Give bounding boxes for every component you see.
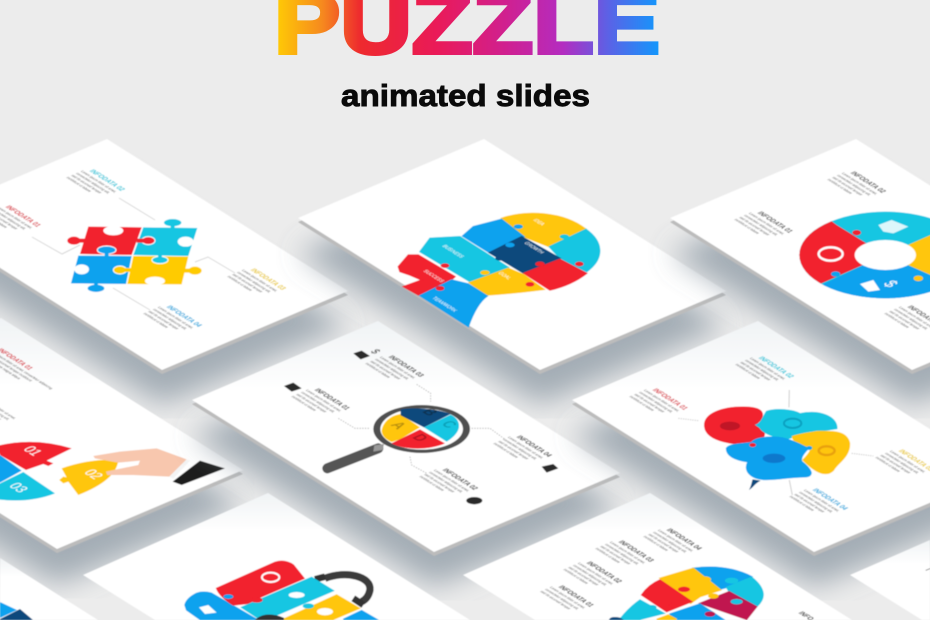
text: infodata 02 <box>418 466 479 499</box>
slide: bottom right partial <box>850 540 930 620</box>
text: infodata 02: consectetur adipiscing elit, <box>75 172 111 194</box>
text: infodata 03: sed do eiusmod tempor <box>599 545 632 565</box>
hand and pieces: 02 <box>80 467 107 481</box>
slide: magnifier <box>192 321 620 587</box>
text: infodata 04 <box>492 433 553 466</box>
text: infodata 01: sed do eiusmod tempor <box>539 590 572 610</box>
text: infodata 01: INFODATA 01 <box>556 585 595 608</box>
text: infodata 04: INFODATA 04 <box>514 435 553 458</box>
text: infodata 04: sed do eiusmod tempor <box>497 440 530 460</box>
text: infodata 02: sed do eiusmod tempor <box>739 361 772 381</box>
text: infodata 04: consectetur adipiscing elit, <box>893 308 929 330</box>
slide: puzzle bag <box>83 493 470 620</box>
text: infodata 01: sed do eiusmod tempor <box>295 393 328 413</box>
donut puzzle ring: $ <box>879 279 902 290</box>
text: infodata 02: INFODATA 02 <box>848 171 887 194</box>
text: infodata 01: Lorem ipsum dolor sit amet, <box>747 212 786 235</box>
text: infodata 04: sed do eiusmod tempor <box>147 310 180 330</box>
text: infodata 04: consectetur adipiscing elit, <box>652 531 688 553</box>
text: infodata 02: consectetur adipiscing elit, <box>744 359 780 381</box>
head labels: BUSINESS <box>440 244 466 259</box>
text: infodata 02 <box>826 169 887 202</box>
text: infodata 02: Lorem ipsum dolor sit amet, <box>576 562 615 585</box>
slide: puzzle donut <box>670 139 930 405</box>
text: infodata 01: sed do eiusmod tempor <box>738 216 771 236</box>
text: infodata 02: consectetur adipiscing elit, <box>428 471 464 493</box>
text: infodata 02: incididunt ut labore <box>734 363 761 380</box>
text: infodata 04: Lorem ipsum dolor sit amet, <box>506 436 545 459</box>
text: infodata 04: sed do eiusmod tempor <box>793 493 826 513</box>
hand and pieces: 01 <box>20 444 46 458</box>
head puzzle pieces <box>398 213 600 327</box>
text: infodata 04: incididunt ut labore <box>883 312 910 329</box>
head labels: IDEA <box>531 218 546 227</box>
text: infodata 04: consectetur adipiscing elit, <box>152 308 188 330</box>
text: infodata 04 <box>142 303 203 336</box>
connector lines <box>338 384 505 473</box>
text: infodata 02: sed do eiusmod tempor <box>831 176 864 196</box>
text: infodata 02: INFODATA 02 <box>87 169 126 192</box>
head labels: GROWTH <box>522 241 545 255</box>
slide: hand placing piece <box>0 318 243 585</box>
slide: jigsaw square <box>0 139 348 405</box>
text: infodata 04: consectetur adipiscing elit, <box>798 491 834 513</box>
magnifying glass: A <box>386 420 410 431</box>
text: infodata 01: INFODATA 01 <box>3 205 42 228</box>
text: infodata 03 <box>226 266 287 299</box>
magnifying glass: C <box>437 419 461 430</box>
text: infodata 04: INFODATA 04 <box>664 528 703 551</box>
text: infodata 04: Lorem ipsum dolor sit amet, <box>802 489 841 512</box>
text: infodata 01: Lorem ipsum dolor sit amet, <box>548 586 587 609</box>
slide: puzzle head <box>298 139 726 405</box>
text: infodata 01: Lorem ipsum dolor sit amet, <box>304 389 343 412</box>
bulb puzzle <box>610 567 763 619</box>
text: infodata 04: Lorem ipsum dolor sit amet, <box>156 306 195 329</box>
text: infodata 01 <box>290 386 351 419</box>
text: infodata 03 <box>364 353 425 386</box>
hand and pieces: 03 <box>5 481 32 494</box>
text: infodata 03: Lorem ipsum dolor sit amet, <box>608 541 647 564</box>
text: infodata 01: consectetur adipiscing elit, <box>300 391 336 413</box>
slide: bottom left partial <box>0 558 98 620</box>
text: infodata 02 <box>65 167 126 200</box>
text: infodata 01: Lorem ipsum dolor sit amet, <box>642 389 681 412</box>
text: infodata 04: Lorem ipsum dolor sit amet, <box>656 529 695 552</box>
text: infodata 02: consectetur adipiscing elit, <box>836 174 872 196</box>
text: infodata 02: incididunt ut labore <box>65 176 92 193</box>
connector lines <box>678 390 873 495</box>
text: infodata 02 <box>562 559 623 592</box>
text: infodata 04 <box>788 486 849 519</box>
cloud puzzle <box>705 407 849 490</box>
text: infodata 03: Lorem ipsum dolor sit amet, <box>240 269 279 292</box>
magnifying glass: D <box>408 432 432 444</box>
text: infodata 04: consectetur adipiscing elit, <box>502 438 538 460</box>
text: infodata 03: incididunt ut labore <box>594 547 621 564</box>
text: infodata 02: INFODATA 02 <box>584 561 623 584</box>
text: infodata 02: sed do eiusmod tempor <box>70 174 103 194</box>
text: infodata 03: Lorem ipsum dolor sit amet, <box>378 356 417 379</box>
text: infodata 01: incididunt ut labore <box>733 218 760 235</box>
text: infodata 03: INFODATA 03 <box>616 540 655 563</box>
text: infodata 03: incididunt ut labore <box>874 456 901 473</box>
text: infodata 02 <box>734 354 795 387</box>
text: infodata 03: incididunt ut labore <box>364 362 391 379</box>
dark icons: $ <box>367 348 383 356</box>
text: infodata 02: sed do eiusmod tempor <box>567 566 600 586</box>
text: infodata 02: sed do eiusmod tempor <box>423 473 456 493</box>
text: infodata 01: consectetur adipiscing elit, <box>544 588 580 610</box>
text: infodata 04: INFODATA 04 <box>810 488 849 511</box>
text: infodata 01 <box>628 386 689 419</box>
text: infodata 04: incididunt ut labore <box>642 535 669 552</box>
text: infodata 02: incididunt ut labore <box>826 178 853 195</box>
text: infodata 02: incididunt ut labore <box>562 568 589 585</box>
text: infodata 01: INFODATA 01 <box>312 388 351 411</box>
text: infodata 03: INFODATA 03 <box>386 355 425 378</box>
text: infodata 04: incididunt ut labore <box>788 495 815 512</box>
text: infodata 04 <box>642 526 703 559</box>
text: infodata 01: INFODATA 01 <box>755 211 794 234</box>
text: infodata 03: consectetur adipiscing elit, <box>374 358 410 380</box>
magnifying glass <box>327 405 470 468</box>
text: infodata 03: sed do eiusmod tempor <box>879 454 912 474</box>
text: infodata 04: incididunt ut labore <box>142 312 169 329</box>
text: infodata 01: incididunt ut labore <box>628 395 655 412</box>
text: infodata 02: Lorem ipsum dolor sit amet, <box>79 170 118 193</box>
text: infodata 03 <box>874 447 930 480</box>
text: infodata 04: INFODATA 04 <box>164 305 203 328</box>
text: infodata 03: consectetur adipiscing elit, <box>884 452 920 474</box>
text: infodata 01 <box>0 203 42 236</box>
jigsaw four pieces <box>67 219 202 292</box>
text: infodata 04: sed do eiusmod tempor <box>888 310 921 330</box>
text: infodata 02: Lorem ipsum dolor sit amet, <box>432 469 471 492</box>
text: infodata 02: INFODATA 02 <box>440 468 479 491</box>
text: infodata 03: sed do eiusmod tempor <box>231 273 264 293</box>
text: infodata 04 <box>883 303 930 336</box>
text: infodata 02: consectetur adipiscing elit, <box>572 564 608 586</box>
text: infodata 01: sed do eiusmod tempor <box>633 393 666 413</box>
text: infodata 03: incididunt ut labore <box>226 275 253 292</box>
bag puzzle <box>185 561 377 619</box>
text: infodata 01 <box>733 209 794 242</box>
text: infodata 01: INFODATA 01 <box>650 388 689 411</box>
head labels <box>421 218 546 313</box>
head labels: TEAMWORK <box>430 296 459 313</box>
text: infodata 02: Lorem ipsum dolor sit amet, <box>840 172 879 195</box>
text: infodata 01: consectetur adipiscing elit, <box>743 214 779 236</box>
head labels: SUCCESS <box>421 269 446 284</box>
partial pieces <box>0 602 33 620</box>
text: infodata 02: INFODATA 02 <box>756 356 795 379</box>
text: infodata 01: incididunt ut labore <box>290 395 317 412</box>
subtitle: animated slides <box>341 78 590 113</box>
text: infodata 03: consectetur adipiscing elit, <box>604 543 640 565</box>
head labels: GOAL <box>496 271 513 281</box>
slide: puzzle bulb <box>463 493 852 620</box>
text: infodata 03: sed do eiusmod tempor <box>369 360 402 380</box>
text: infodata 03 <box>594 538 655 571</box>
slide: speech cloud <box>572 321 930 587</box>
text: infodata 03: INFODATA 03 <box>248 268 287 291</box>
text: infodata 01 <box>539 583 595 614</box>
text: infodata 03: consectetur adipiscing elit, <box>236 271 272 293</box>
text: infodata 01: consectetur adipiscing elit, <box>638 391 674 413</box>
magnifying glass: B <box>418 406 442 418</box>
text: infodata 04: incididunt ut labore <box>492 442 519 459</box>
text: infodata 04: sed do eiusmod tempor <box>647 533 680 553</box>
donut puzzle ring <box>798 210 930 300</box>
text: infodata 03: Lorem ipsum dolor sit amet, <box>888 450 927 473</box>
dark icons <box>284 348 558 504</box>
hand and pieces <box>0 442 225 500</box>
text: infodata 02: Lorem ipsum dolor sit amet, <box>748 357 787 380</box>
text: infodata 02: incididunt ut labore <box>418 475 445 492</box>
